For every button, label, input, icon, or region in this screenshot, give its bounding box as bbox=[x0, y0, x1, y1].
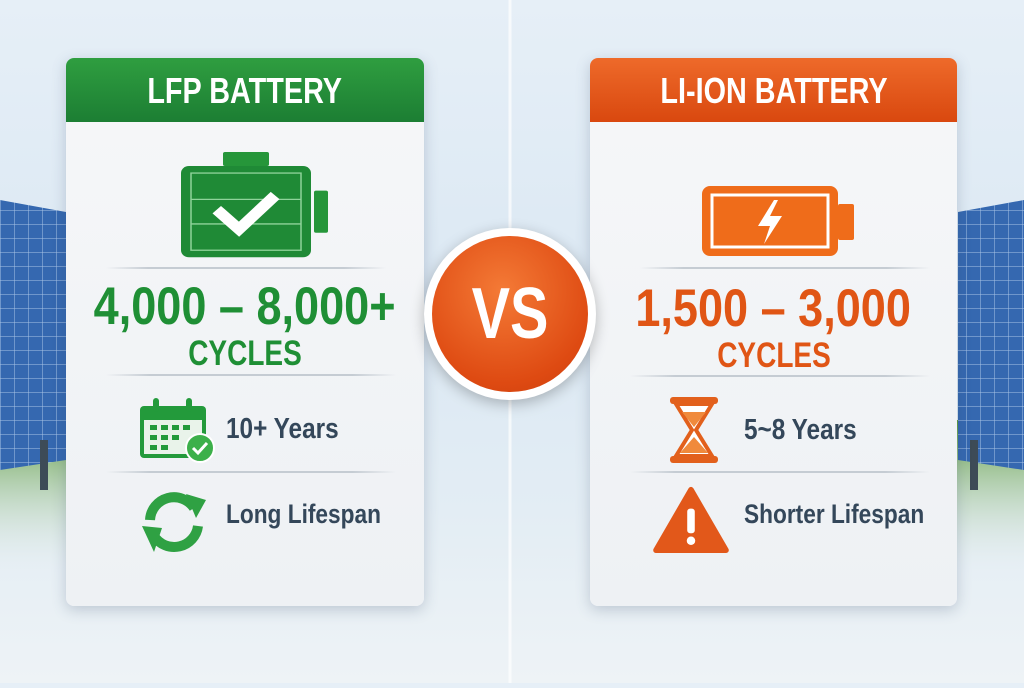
panel: LFP battery bbox=[66, 58, 424, 606]
icon: hourglass bbox=[670, 397, 718, 463]
icon: refresh arrows bbox=[142, 492, 206, 552]
heading: LFP battery bbox=[66, 58, 424, 122]
panel: LFP battery: CYCLES bbox=[188, 334, 302, 373]
panel: Li-ion battery: CYCLES bbox=[717, 336, 830, 375]
text: 10+ years: 10+ Years bbox=[226, 413, 339, 445]
heading: LFP battery: LFP BATTERY bbox=[148, 70, 342, 111]
heading: Li-ion battery bbox=[590, 58, 957, 122]
badge: VS circle: VS bbox=[472, 274, 548, 354]
icon: orange battery with bolt bbox=[702, 186, 854, 256]
icon: calendar bbox=[140, 398, 215, 463]
text: long lifespan: Long Lifespan bbox=[226, 499, 381, 529]
heading: Li-ion battery: LI-ION BATTERY bbox=[660, 70, 887, 111]
panel: Li-ion battery bbox=[590, 58, 957, 606]
text: shorter lifespan: Shorter Lifespan bbox=[744, 499, 924, 529]
badge: VS circle bbox=[424, 228, 596, 400]
text: Li-ion cycles: 1,500 – 3,000 bbox=[636, 279, 911, 338]
text: 5~8 years: 5~8 Years bbox=[744, 414, 857, 446]
text: LFP cycles: 4,000 – 8,000+ bbox=[94, 277, 396, 336]
icon: warning triangle bbox=[653, 486, 729, 553]
icon: green battery with check bbox=[181, 152, 328, 258]
